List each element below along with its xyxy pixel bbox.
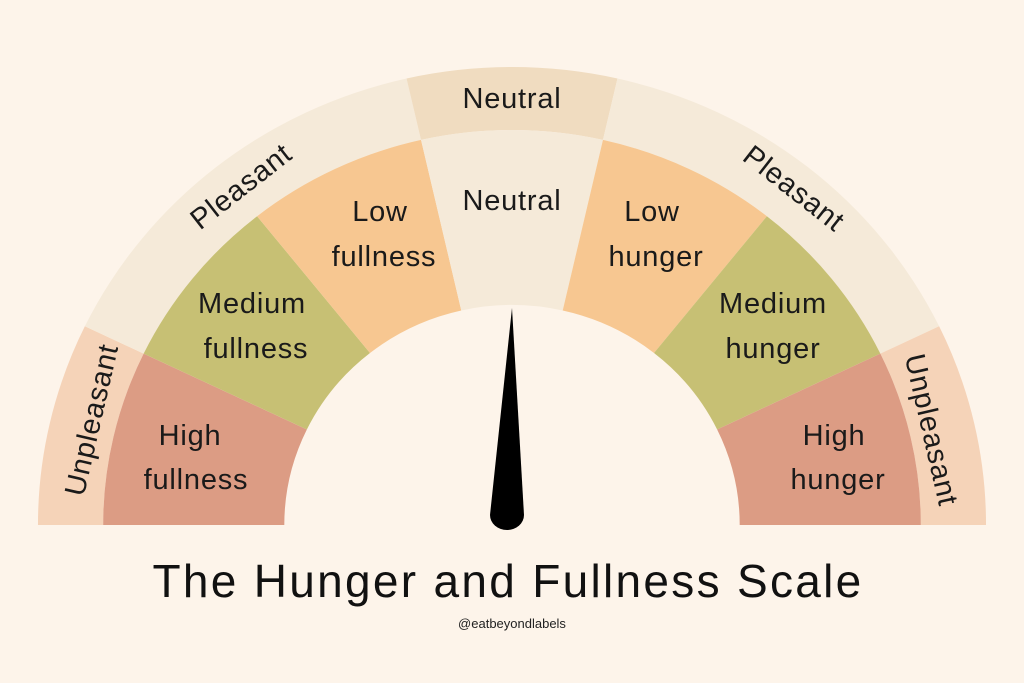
outer band: pleasant left	[85, 78, 421, 354]
segment: neutral	[421, 130, 603, 310]
label: medium fullness: Medium	[198, 288, 306, 320]
segment: medium fullness	[144, 216, 370, 430]
gauge labels: fullness	[144, 464, 248, 496]
gauge labels	[59, 83, 964, 509]
gauge labels: fullness	[332, 241, 436, 273]
label: medium hunger: Medium	[719, 288, 827, 320]
label: high fullness: High	[159, 420, 221, 452]
label: unpleasant left: Unpleasant	[59, 341, 125, 499]
label: low hunger: Low	[624, 196, 680, 228]
outer band: pleasant right	[603, 78, 939, 354]
label: low fullness: Low	[352, 196, 408, 228]
outer band: unpleasant right	[880, 326, 986, 525]
segment: low fullness	[257, 140, 461, 353]
label: high hunger: High	[803, 420, 865, 452]
segment: medium hunger	[654, 216, 880, 430]
handle: @eatbeyondlabels	[458, 616, 566, 631]
gauge labels: hunger	[790, 464, 886, 496]
gauge labels: hunger	[608, 241, 704, 273]
label: neutral inner: Neutral	[462, 185, 562, 217]
label: pleasant left: Pleasant	[185, 138, 298, 236]
label: pleasant right: Pleasant	[737, 140, 850, 238]
segment: high hunger	[717, 354, 921, 525]
gauge labels: hunger	[725, 333, 821, 365]
title: The Hunger and Fullness Scale	[152, 555, 864, 607]
outer band: neutral	[407, 67, 617, 140]
segment: low hunger	[563, 140, 767, 353]
gauge	[38, 67, 986, 525]
label: neutral outer: Neutral	[462, 83, 562, 115]
gauge labels: fullness	[204, 333, 308, 365]
label: unpleasant right: Unpleasant	[898, 351, 964, 509]
outer band: unpleasant left	[38, 326, 144, 525]
needle	[490, 308, 524, 530]
segment: high fullness	[103, 354, 307, 525]
